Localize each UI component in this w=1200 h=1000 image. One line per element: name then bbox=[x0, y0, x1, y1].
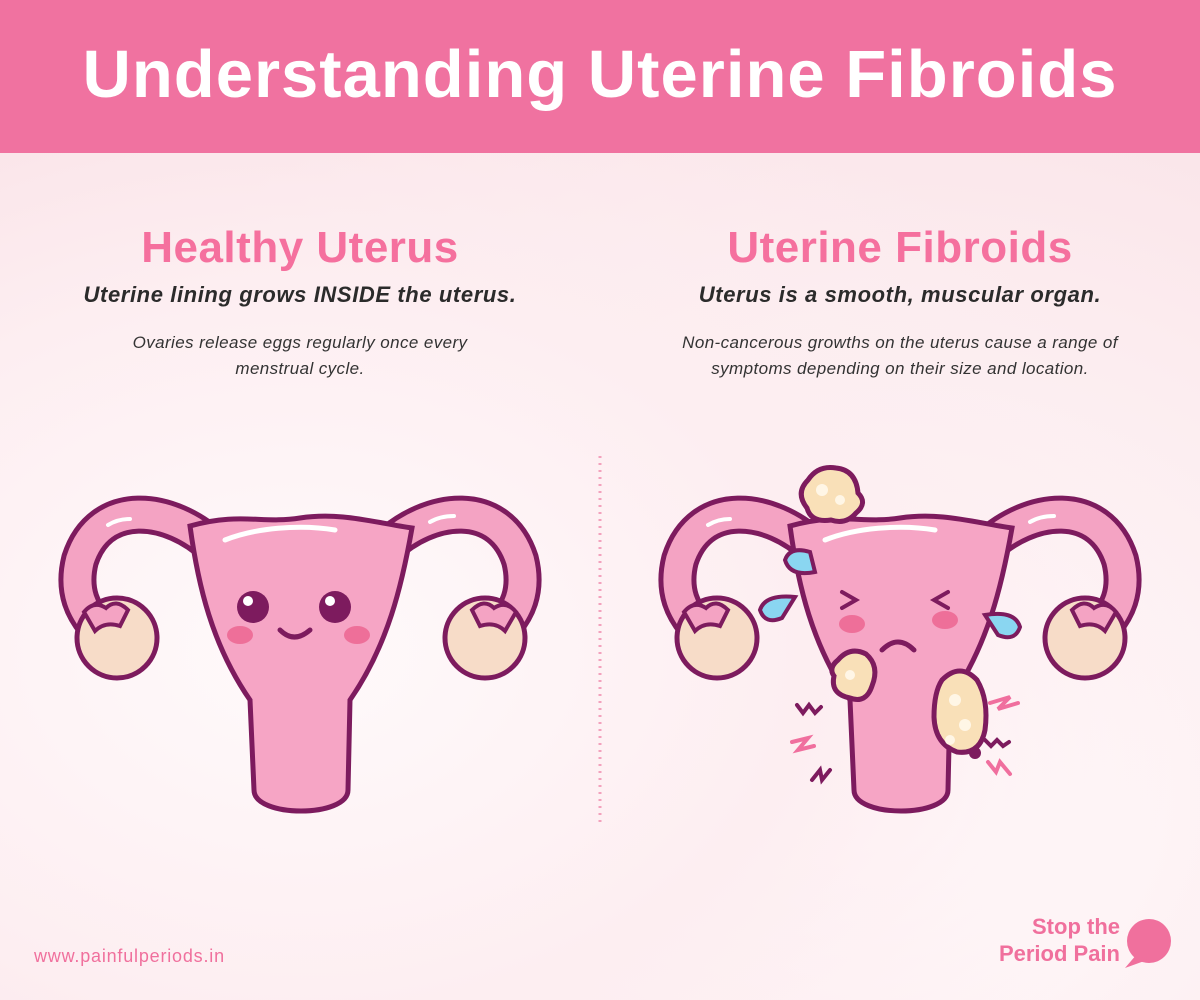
illustration: healthy uterus bbox=[77, 515, 525, 811]
logo: stop the period pain: Stop the bbox=[1032, 914, 1120, 939]
face sad bbox=[839, 592, 958, 650]
header banner bbox=[0, 0, 1200, 153]
face happy bbox=[227, 591, 370, 644]
heading: healthy uterus: Healthy Uterus bbox=[141, 223, 459, 272]
subtitle fibroids: Uterus is a smooth, muscular organ. bbox=[699, 282, 1101, 307]
description healthy: Ovaries release eggs regularly once every menstrual cycle. bbox=[133, 333, 467, 378]
panel: healthy uterus text bbox=[84, 223, 516, 378]
icon: speech bubble bbox=[1125, 919, 1171, 968]
logo: stop the period pain: Period Pain bbox=[999, 941, 1120, 966]
tears bbox=[760, 550, 1020, 637]
logo: stop the period pain bbox=[999, 914, 1171, 968]
divider bbox=[598, 456, 602, 826]
panel: fibroids text bbox=[682, 223, 1119, 378]
subtitle healthy: Uterine lining grows INSIDE the uterus. bbox=[84, 282, 516, 307]
title: Understanding Uterine Fibroids bbox=[82, 37, 1118, 112]
description fibroids: Non-cancerous growths on the uterus cause a range of symptoms depending on their size and location. bbox=[682, 333, 1118, 378]
footer url: www.painfulperiods.in bbox=[34, 946, 225, 966]
illustration: uterus with fibroids bbox=[677, 468, 1125, 811]
heading: uterine fibroids: Uterine Fibroids bbox=[727, 223, 1073, 272]
fibroid growths bbox=[801, 468, 986, 752]
pain zigzags bbox=[792, 697, 1018, 780]
